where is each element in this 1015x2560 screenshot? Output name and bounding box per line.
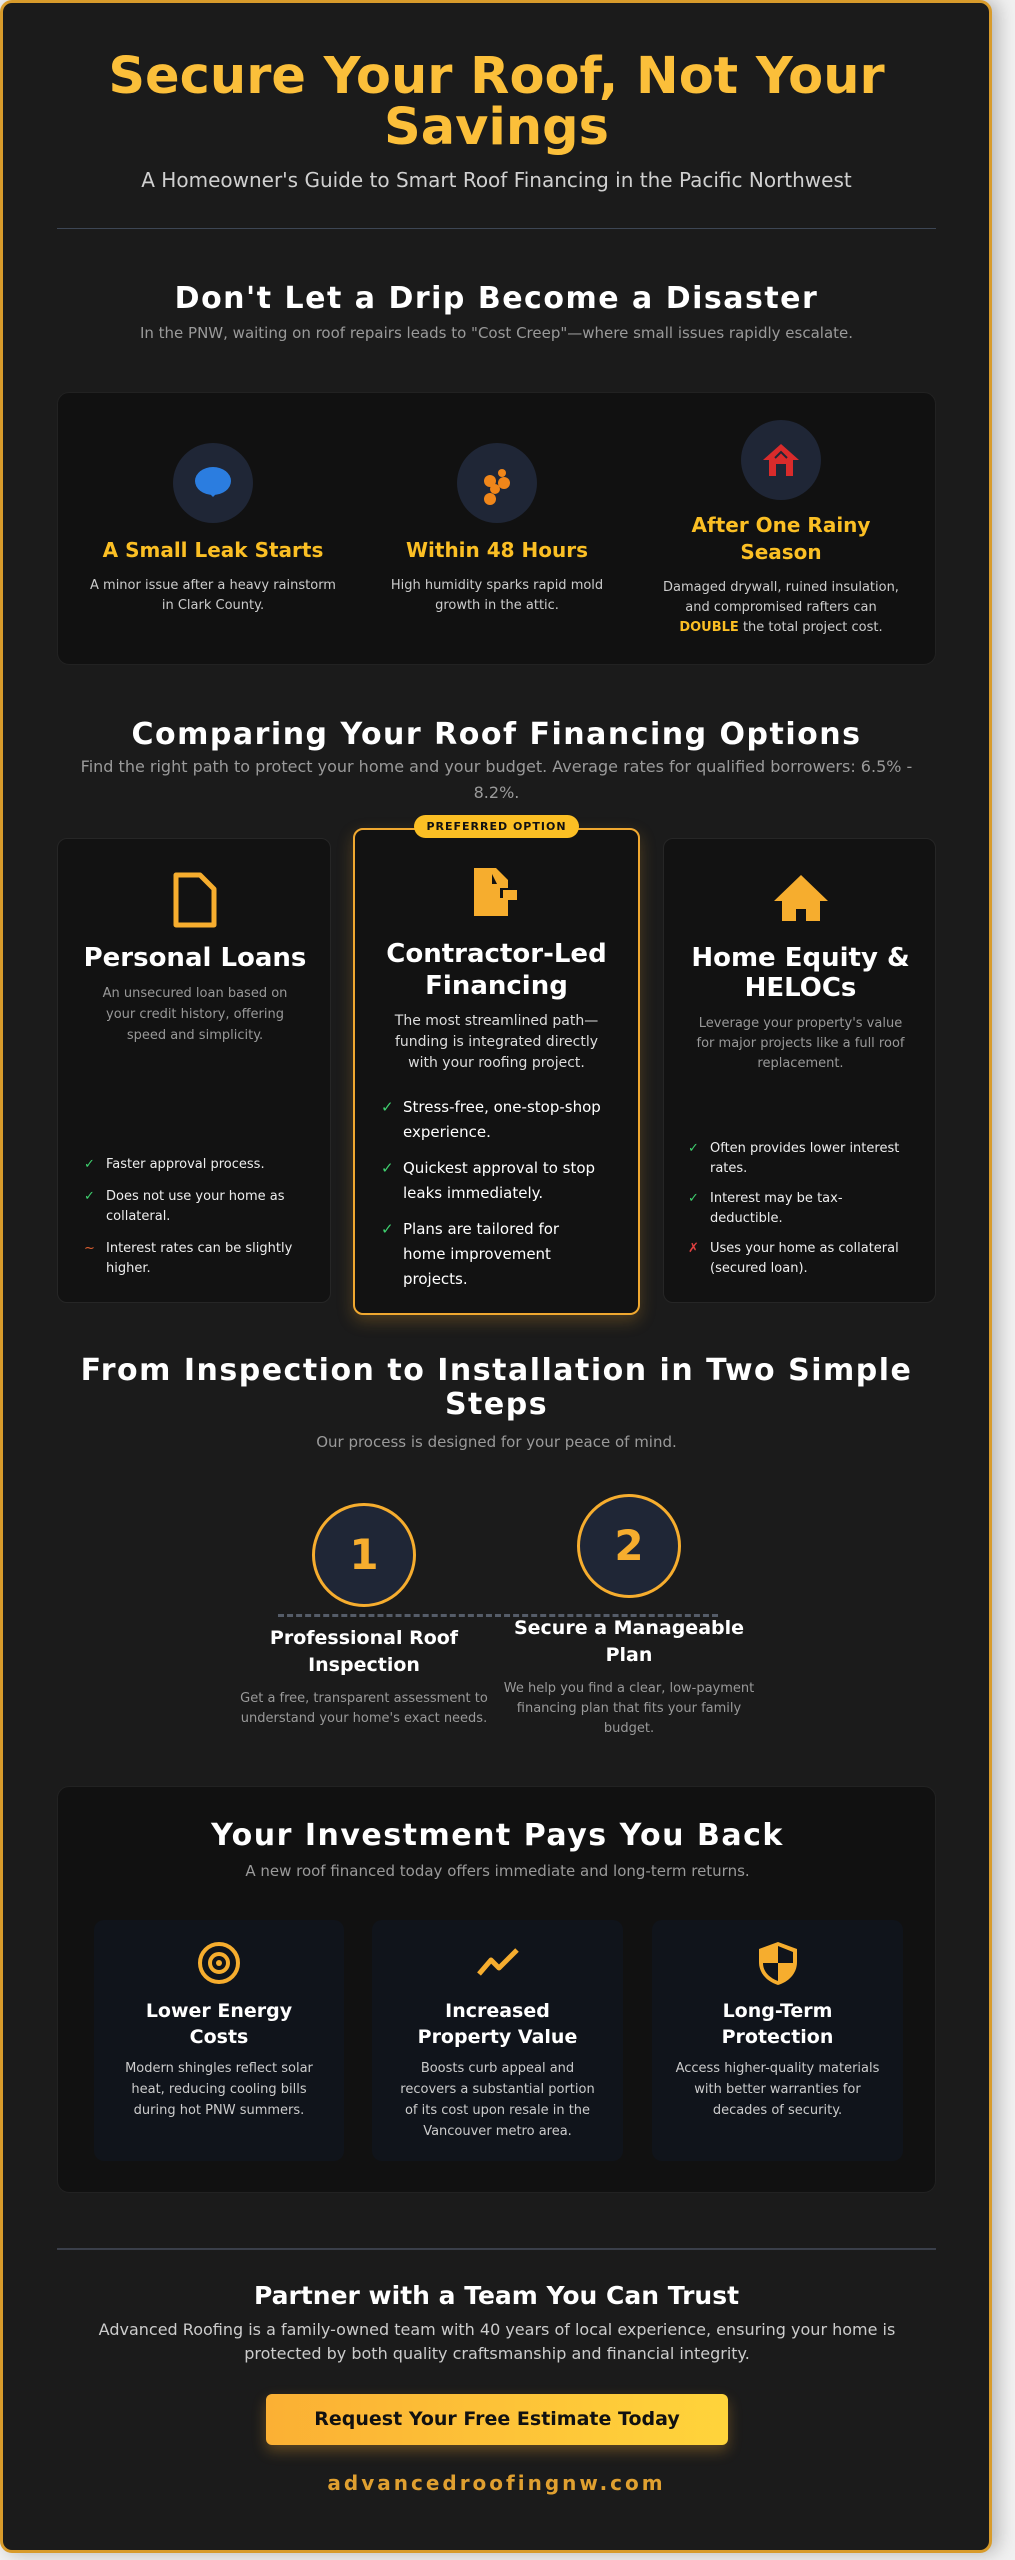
benefit: energy: Costs [190,2026,248,2048]
bullets: Stress-free, one-stop-shop experience. [403,1098,601,1141]
subheading: A new roof financed today offers immediate and long-term returns. [245,1862,750,1880]
panel: investment [57,1786,936,2193]
desc: Leverage your property's value for major projects like a full roof replacement. [697,1016,904,1071]
step: 48 hours: Within 48 Hours [406,538,588,562]
icon: target [198,1942,240,1984]
bullets: ✓ [84,1189,95,1204]
step 2 [504,1494,754,1736]
icon: contractor doc [474,868,517,916]
bullets [688,1141,900,1276]
title: personal loans: Personal Loans [84,943,306,973]
url: advancedroofingnw.com [327,2471,666,2495]
bullets: Often provides lower interest rates. [710,1141,899,1176]
bullets: ✓ [381,1159,394,1177]
step 1: Inspection [308,1654,420,1676]
subheading: steps: Our process is designed for your peace of mind. [316,1433,677,1451]
step: rainy season: DOUBLE the total project cost. [679,620,883,635]
subheading: drip: In the PNW, waiting on roof repairs leads to "Cost Creep"—where small issues rapidly escalate. [140,324,853,342]
icon: damaged house [741,420,821,500]
bullets: ~ [84,1241,95,1256]
circle 1: 1 [349,1530,379,1579]
icon: water drop [173,443,253,523]
card: contractor financing [353,828,640,1315]
bullets: Plans are tailored for home improvement projects. [403,1220,559,1288]
benefit: energy [94,1920,344,2161]
heading: drip: Don't Let a Drip Become a Disaster [175,281,818,316]
benefit: protection: Long-Term [723,2000,832,2022]
text: trust: Advanced Roofing is a family-owned team with 40 years of local experience, ensuring your home is protected by both quality craftsmanship and financial integrity. [99,2320,895,2363]
circle 2: 2 [614,1521,644,1570]
bullets: Faster approval process. [106,1157,265,1172]
benefit: value: Increased [445,2000,550,2022]
title: contractor: Contractor-Led [386,939,607,969]
panel: cost creep [57,392,936,665]
step: rainy season: and compromised rafters can [685,600,877,615]
step: small leak: A minor issue after a heavy rainstorm [90,578,336,593]
subheading: financing: Find the right path to protect your home and your budget. Average rates for qualified borrowers: 6.5% - 8.2%. [81,757,912,802]
step 2: Plan [606,1644,652,1666]
step: 48 hours: High humidity sparks rapid mold [391,578,603,593]
title: home equity: HELOCs [745,973,856,1003]
heading: financing: Comparing Your Roof Financing Options [132,717,861,752]
badge: preferred option: PREFERRED OPTION [426,820,567,833]
bullets: ✓ [688,1141,699,1156]
step: rainy season: After One Rainy [692,513,870,537]
bullets: ✓ [381,1098,394,1116]
benefit: protection: Protection [722,2026,833,2048]
step: rainy season: Damaged drywall, ruined insulation, [663,580,899,595]
icon: document [174,872,216,928]
title: home equity [691,943,910,1003]
bullets: Quickest approval to stop leaks immediately. [403,1159,595,1202]
card: personal loans [57,838,331,1303]
heading: steps: From Inspection to Installation in Two Simple Steps [81,1353,912,1422]
icon: shield [759,1942,797,1985]
step 2: Secure a Manageable [514,1617,744,1639]
step: small leak: in Clark County. [162,598,264,613]
benefit: value: Boosts curb appeal and recovers a substantial portion of its cost upon resale in the Vancouver metro area. [400,2061,595,2139]
badge: preferred option [414,815,579,838]
bullets: ✓ [84,1157,95,1172]
bullets [84,1157,292,1276]
benefit: protection: Access higher-quality materials with better warranties for decades of security. [676,2061,879,2118]
step: small leak: A Small Leak Starts [103,538,323,562]
bullets: Uses your home as collateral (secured loan). [710,1241,899,1276]
button: estimate: Request Your Free Estimate Today [314,2408,680,2430]
step 1 [240,1503,488,1726]
step: rainy season: Season [740,540,822,564]
desc: An unsecured loan based on your credit history, offering speed and simplicity. [103,986,287,1043]
circle 2 [577,1494,681,1598]
button: estimate [266,2394,728,2445]
benefit: energy: Modern shingles reflect solar heat, reducing cooling bills during hot PNW summers. [125,2061,313,2118]
step: 48 hours [391,538,603,613]
bullets: ✗ [688,1241,699,1256]
benefit: energy: Lower Energy [146,2000,292,2022]
icon: trend [477,1948,519,1976]
circle 1 [312,1503,416,1607]
bullets: Interest rates can be slightly higher. [106,1241,292,1276]
step: rainy season [663,513,899,635]
icon: mold [457,443,537,523]
step: 48 hours: growth in the attic. [435,598,559,613]
heading: trust: Partner with a Team You Can Trust [254,2281,739,2310]
card: home equity [663,838,936,1303]
step 1: Professional Roof [270,1627,458,1649]
title: home equity: Home Equity & [691,943,910,973]
bullets: ✓ [688,1191,699,1206]
step 2: We help you find a clear, low-payment financing plan that fits your family budget. [504,1681,754,1736]
heading: Your Investment Pays You Back [211,1818,784,1853]
benefit: value [372,1920,623,2161]
bullets: ✓ [381,1220,394,1238]
title: contractor [386,939,607,1001]
step: small leak [90,538,336,613]
benefit: value: Property Value [418,2026,577,2048]
title: contractor: Financing [425,971,568,1001]
icon: house [774,875,828,921]
desc: The most streamlined path—funding is integrated directly with your roofing project. [395,1013,598,1071]
bullets: Interest may be tax-deductible. [710,1191,843,1226]
title: Secure Your Roof, Not Your Savings [108,47,885,157]
bullets: Does not use your home as collateral. [106,1189,285,1224]
benefit: protection [652,1920,903,2161]
bullets [381,1098,601,1288]
subtitle: A Homeowner's Guide to Smart Roof Financing in the Pacific Northwest [141,168,852,192]
step 1: Get a free, transparent assessment to understand your home's exact needs. [240,1691,488,1726]
